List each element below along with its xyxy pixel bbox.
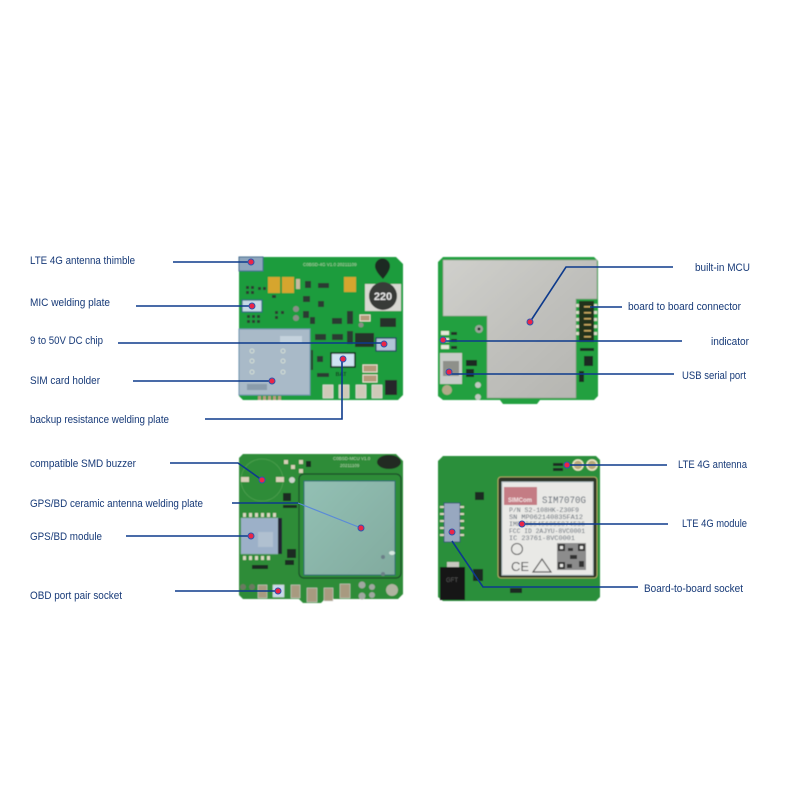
panel: top-right circuit board [438, 257, 598, 404]
small chips [466, 348, 594, 382]
label: LTE 4G antenna: LTE 4G antenna [678, 459, 748, 471]
board silk date: 20211109 [340, 463, 360, 468]
SN line: SN MP062140835FA12 [509, 514, 583, 521]
label: OBD port pair socket: OBD port pair socket [30, 590, 122, 602]
dark power chip [355, 318, 396, 347]
board outline [239, 454, 403, 603]
label: board to board connector: board to board connector [628, 301, 741, 313]
icon: logo [377, 455, 401, 469]
black diode: GFT [446, 578, 458, 584]
icon: teardrop logo [375, 258, 390, 279]
panel: top-left circuit board [239, 257, 403, 400]
board-to-board socket [444, 503, 460, 542]
P/N line: P/N S2-108HK-Z30F9 [509, 507, 579, 514]
board outline [239, 257, 403, 400]
antenna thimble [239, 257, 263, 271]
label: LTE 4G module: LTE 4G module [682, 518, 747, 530]
label: SIM card holder: SIM card holder [30, 375, 100, 387]
DC chip plate [376, 338, 396, 351]
screw pads [293, 306, 364, 328]
buzzer pads [241, 460, 303, 483]
panel: bottom-left circuit board [239, 454, 403, 603]
label: DC chip: 9 to 50V DC chip [30, 335, 103, 347]
bottom pads [258, 584, 350, 602]
label: backup resistance: backup resistance welding plate [30, 414, 169, 426]
SIM7070G module frame [498, 477, 597, 578]
dark SMD [385, 380, 397, 395]
small chips near antenna [473, 463, 563, 593]
IMEI line: IMEI865456055074536 [509, 521, 585, 528]
IC line: IC 23761-8VC0001 [509, 535, 575, 542]
SIM card holder [239, 329, 310, 395]
QR code [557, 543, 586, 570]
callout dots [248, 259, 570, 594]
socket pins [440, 506, 464, 536]
label: USB serial port: USB serial port [682, 370, 746, 382]
capacitor pads [360, 315, 377, 382]
black diode [440, 562, 465, 600]
board silk text: C0BSD-4G V1.0 20211109 [303, 262, 357, 267]
label: compatible SMD buzzer: compatible SMD buzzer [30, 458, 136, 470]
board outline [438, 456, 600, 601]
board outline [438, 257, 598, 404]
tantalum capacitors [268, 277, 356, 293]
SIM contacts [258, 396, 281, 400]
inductor value: 220 [374, 291, 392, 303]
chips near buzzer [283, 461, 311, 508]
CE mark: CE [511, 559, 529, 574]
screw pads [442, 325, 483, 400]
label: MIC welding plate: MIC welding plate [30, 297, 110, 309]
callout lines [118, 262, 682, 591]
small components [246, 279, 353, 377]
BAT label: BAT [336, 372, 347, 378]
SIM7070G module label [502, 482, 593, 575]
panel: bottom-right circuit board [438, 456, 600, 601]
USB port [440, 353, 462, 384]
label: built-in MCU: built-in MCU [695, 262, 750, 274]
FCC line: FCC ID 2AJYU-8VC0001 [509, 528, 585, 535]
antenna rings [573, 460, 597, 470]
board silk text: C0BSD-MCU V1.0 [333, 456, 371, 461]
OBD port pad [273, 585, 284, 597]
MIC welding plate [242, 300, 262, 312]
metal shield [443, 260, 597, 398]
GPS module [241, 513, 282, 560]
buzzer outline [241, 459, 283, 501]
label: LTE 4G antenna thimble: LTE 4G antenna thimble [30, 255, 135, 267]
label: GPS/BD ceramic antenna: GPS/BD ceramic antenna welding plate [30, 498, 203, 510]
certification circle [512, 544, 522, 554]
GPS ceramic antenna [299, 474, 401, 578]
label: Board-to-board socket: Board-to-board socket [644, 583, 743, 595]
label: GPS/BD module: GPS/BD module [30, 531, 102, 543]
indicator LEDs [441, 331, 457, 349]
certification triangle [533, 559, 551, 572]
round pads [240, 582, 398, 600]
board connector [576, 301, 597, 342]
model name: SIM7070G [542, 495, 586, 507]
backup resistance plate [331, 353, 355, 367]
SIMCom logo: SIMCom [508, 498, 532, 504]
label: indicator: indicator [711, 336, 749, 348]
small SMD group [252, 549, 296, 569]
bottom connectors [323, 385, 382, 398]
inductor [365, 282, 401, 311]
